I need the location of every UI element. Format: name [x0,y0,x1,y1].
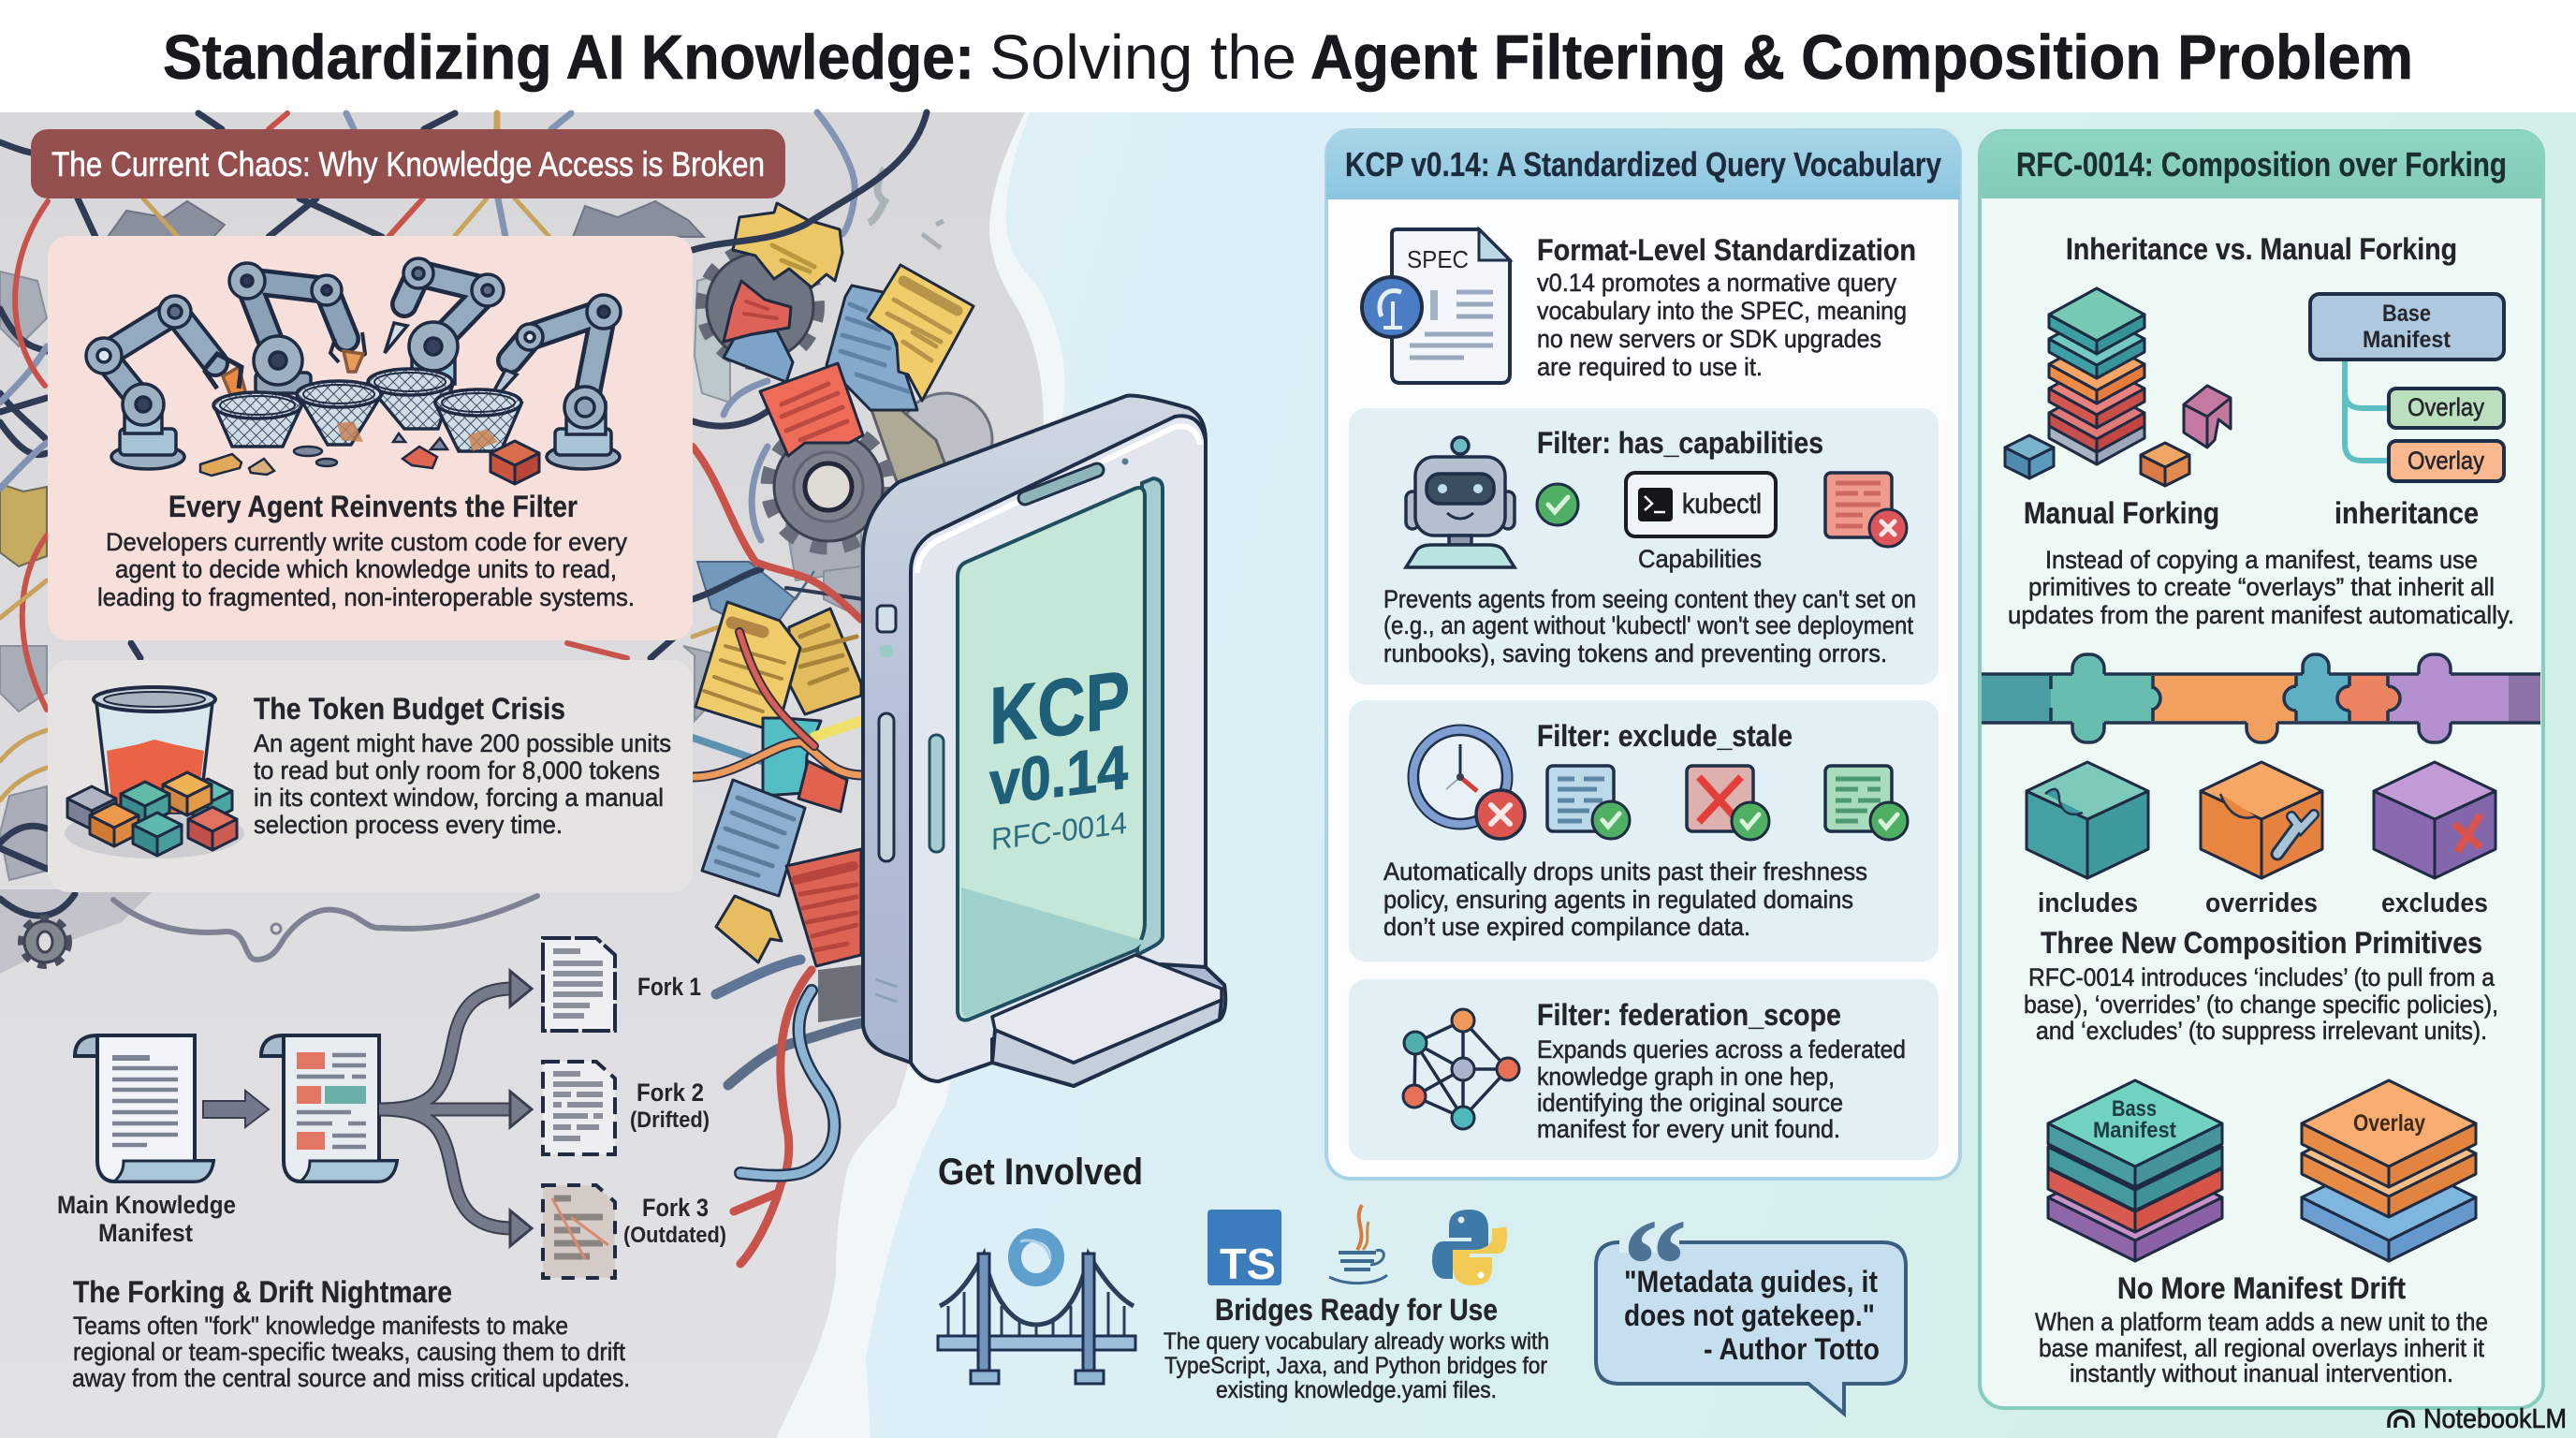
label: fork 3 outdated [623,1194,726,1248]
icon: kubectl chip [1626,473,1776,536]
body text: RFC-0014 introduces ‘includes’ (to pull from a [2028,963,2496,991]
side controls [875,606,944,1002]
body text: updates from the parent manifest automatically. [2008,601,2514,629]
device: KCP v0.14 [863,396,1225,1086]
body text [254,729,671,839]
body text: Automatically drops units past their freshness [1383,858,1867,886]
quote text: - Author Totto [1704,1332,1880,1366]
body text: to read but only room for 8,000 tokens [254,756,660,785]
cables [0,113,866,1085]
icon: robot [1406,437,1515,567]
heading: The Token Budget Crisis [254,692,565,726]
label: fork 3 outdated: Fork 3 [642,1194,709,1222]
body text: agent to decide which knowledge units to read, [115,555,617,583]
base plate [992,1000,1222,1086]
icon: overflowing cup with token blocks [65,687,244,858]
panel header: KCP v0.14: A Standardized Query Vocabulary [1345,145,1941,183]
label: main knowledge manifest [57,1191,236,1247]
label: fork 2 drifted: (Drifted) [630,1108,710,1133]
body text: primitives to create “overlays” that inherit all [2028,573,2495,601]
icon: robot arms over filter baskets [86,258,621,484]
icon: base manifest stack: Manifest [2093,1118,2176,1143]
diagram: inheritance tree [2310,294,2504,481]
heading: Every Agent Reinvents the Filter [168,490,578,523]
icon: fork 2 document [543,1062,615,1154]
label: fork 2 drifted: Fork 2 [637,1078,704,1107]
body text: runbooks), saving tokens and preventing orrors. [1383,639,1887,668]
screen label: v0.14 [989,733,1128,819]
block: federation_scope [1349,979,1939,1160]
quote text [1624,1265,1880,1366]
front face [911,416,1206,1081]
body text: vocabulary into the SPEC, meaning [1537,297,1907,325]
screen label [989,654,1130,858]
icon: typescript: TS [1220,1240,1276,1288]
heading: Filter: has_capabilities [1537,426,1823,460]
base manifest box: Base [2382,301,2431,327]
body text: selection process every time. [254,811,563,839]
arrow: to working copy [203,1091,269,1127]
body text: leading to fragmented, non-interoperable systems. [97,583,635,611]
body text [2008,546,2514,629]
big gear [768,427,888,547]
icon: main manifest scroll [75,1035,213,1181]
body text [2035,1308,2488,1387]
icon: check badge [1537,484,1578,525]
icon: typescript [1208,1210,1281,1288]
overlay box green [2389,389,2504,428]
puzzle band [1982,654,2540,742]
heading: No More Manifest Drift [2117,1271,2406,1305]
cube: includes [2027,762,2148,918]
body text: regional or team-specific tweaks, causing them to drift [73,1338,625,1366]
icon: valid document [1547,766,1630,839]
body text: instantly without inanual intervention. [2070,1359,2453,1387]
body text: TypeScript, Jaxa, and Python bridges for [1164,1353,1547,1379]
body text: in its context window, forcing a manual [254,784,664,812]
icon: spec document: SPEC [1407,245,1469,273]
icon: overlay stack: Overlay [2353,1110,2425,1137]
body text: base manifest, all regional overlays inherit it [2039,1334,2484,1362]
heading: Format-Level Standardization [1537,233,1916,267]
body text [72,1312,630,1392]
section: forking and drift nightmare [57,938,726,1392]
body text: don’t use expired compilance data. [1383,913,1750,941]
subheading: inheritance vs manual forking: Inheritance vs. Manual Forking [2066,232,2457,266]
panel: KCP v0.14 query vocabulary [1326,130,1960,1179]
panel: token budget crisis [48,660,693,892]
block: exclude_stale [1349,700,1939,961]
overlay box orange: Overlay [2408,447,2484,475]
body text: When a platform team adds a new unit to the [2035,1308,2488,1336]
overlay box green: Overlay [2408,393,2484,421]
chaos cables and debris [0,112,992,1264]
panel: RFC-0014 composition over forking [1980,131,2543,1408]
body text: v0.14 promotes a normative query [1537,269,1896,297]
body text: Teams often "fork" knowledge manifests to make [73,1312,568,1340]
banner: the current chaos [31,129,785,198]
heading: Filter: exclude_stale [1537,719,1793,753]
body text: Prevents agents from seeing content they can't set on [1383,585,1916,613]
overlay box orange [2389,441,2504,481]
body text: base), ‘overrides’ (to change specific policies), [2024,990,2498,1019]
block: has_capabilities [1349,408,1939,684]
icon: bridge with swirl [938,1235,1135,1384]
label: main knowledge manifest: Manifest [98,1219,193,1247]
body text: Instead of copying a manifest, teams use [2045,546,2478,574]
top speaker slot [1025,470,1097,498]
body text [97,528,635,611]
panel header [1980,131,2543,198]
panel: every agent reinvents the filter [48,236,693,640]
label: manual forking: Manual Forking [2024,496,2219,530]
section: get involved [938,1152,1906,1414]
panel header [1326,130,1960,199]
cube: includes: includes [2038,888,2138,918]
background: white transition band [0,112,1065,1438]
body text: are required to use it. [1537,353,1763,381]
rear screen [1137,478,1163,955]
body text: The query vocabulary already works with [1164,1328,1549,1355]
heading: Get Involved [938,1152,1143,1193]
label: fork 2 drifted [630,1078,710,1133]
arrows: three forks [379,971,532,1246]
icon: overlay stack [2302,1080,2476,1261]
body text [1164,1328,1549,1403]
label: fork 3 outdated: (Outdated) [623,1223,726,1248]
icon: base manifest stack: Bass [2112,1096,2157,1122]
label: capabilities: Capabilities [1638,545,1762,573]
icon: kubectl chip: kubectl [1682,489,1762,520]
quote text: "Metadata guides, it [1624,1265,1878,1299]
icon: base manifest stack [2048,1080,2222,1261]
text: bridges ready for use: Bridges Ready for Use [1215,1293,1498,1327]
cube: overrides: overrides [2205,888,2318,918]
body text [1383,858,1867,941]
block: format-level standardization [1362,229,1916,383]
icon: spec document [1362,229,1510,383]
torn papers [724,203,973,410]
body text: An agent might have 200 possible units [254,729,671,757]
body text: existing knowledge.yami files. [1216,1377,1497,1403]
icon: fresh document [1825,766,1908,840]
body text: and ‘excludes’ (to suppress irrelevant units). [2036,1017,2487,1045]
quote mark: “ [1622,1193,1688,1338]
background: grey chaos side [0,112,1044,1438]
screen [958,488,1145,1020]
body text [1383,585,1916,668]
cube: overrides [2201,762,2322,918]
lower-left gear [22,919,67,964]
base manifest box [2310,294,2504,360]
title: Solving the [989,22,1296,93]
icon: blocked document [1825,473,1907,547]
icon: fork 1 document [543,938,615,1031]
icon: expired clock [1409,726,1525,839]
screen label: KCP [989,654,1130,762]
icon: network graph [1403,1009,1519,1129]
icon: manual forking stack [2005,288,2231,486]
label: fork 1: Fork 1 [637,973,701,1001]
banner: the current chaos: The Current Chaos: Why Knowledge Access is Broken [51,145,765,183]
body text [2024,963,2498,1045]
title: Agent Filtering & Composition Problem [1310,22,2413,93]
label: main knowledge manifest: Main Knowledge [57,1191,236,1219]
cube: excludes [2374,762,2496,918]
title: Standardizing AI Knowledge: [163,22,974,93]
quote text: does not gatekeep." [1624,1299,1875,1332]
icon: java [1329,1205,1387,1284]
callout: author quote [1596,1193,1906,1414]
icon: rejected document [1687,766,1769,840]
body text: knowledge graph in one hep, [1537,1063,1835,1091]
body text: away from the central source and miss critical updates. [72,1364,630,1392]
screen label: RFC-0014 [991,806,1127,858]
heading: The Forking & Drift Nightmare [73,1275,452,1309]
body text: Expands queries across a federated [1537,1035,1906,1064]
body text: policy, ensuring agents in regulated domains [1383,886,1853,914]
body text: identifying the original source [1537,1089,1843,1117]
body text: Developers currently write custom code for every [106,528,627,556]
icon: python [1432,1210,1507,1285]
body text: manifest for every unit found. [1537,1115,1840,1143]
watermark: NotebookLM: NotebookLM [2423,1404,2567,1434]
heading: Three New Composition Primitives [2041,926,2482,960]
body text [1537,269,1907,381]
icon: fork 3 outdated document [543,1185,615,1278]
heading: Filter: federation_scope [1537,998,1841,1032]
body text: (e.g., an agent without 'kubectl' won't see deployment [1383,611,1913,639]
small gears [702,248,992,487]
body text [1537,1035,1906,1143]
cube: excludes: excludes [2381,888,2488,918]
icon: modified manifest scroll [261,1035,397,1181]
base manifest box: Manifest [2363,327,2452,353]
title [163,22,2413,93]
body text: no new servers or SDK upgrades [1537,325,1881,353]
label: inheritance: inheritance [2334,496,2479,530]
